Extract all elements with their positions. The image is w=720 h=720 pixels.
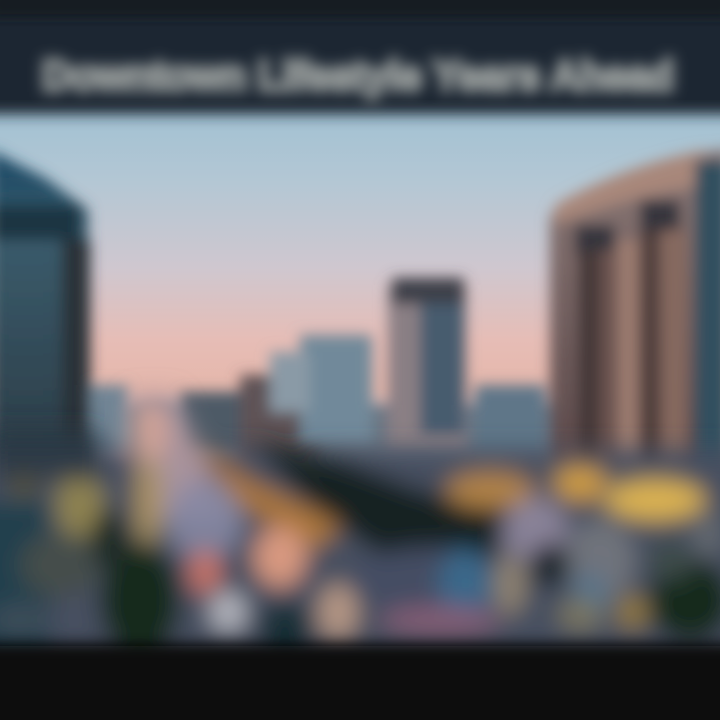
distant buildings [88, 335, 570, 485]
road lights and greenery [0, 395, 720, 658]
right tower [550, 148, 720, 480]
left tower [0, 150, 90, 470]
buildings [0, 148, 720, 485]
title: Downtown Lifestyle Years Ahead [42, 52, 674, 100]
sky [0, 100, 720, 500]
bottom bar [0, 646, 720, 720]
central tower [388, 278, 466, 450]
title bar [0, 0, 720, 114]
